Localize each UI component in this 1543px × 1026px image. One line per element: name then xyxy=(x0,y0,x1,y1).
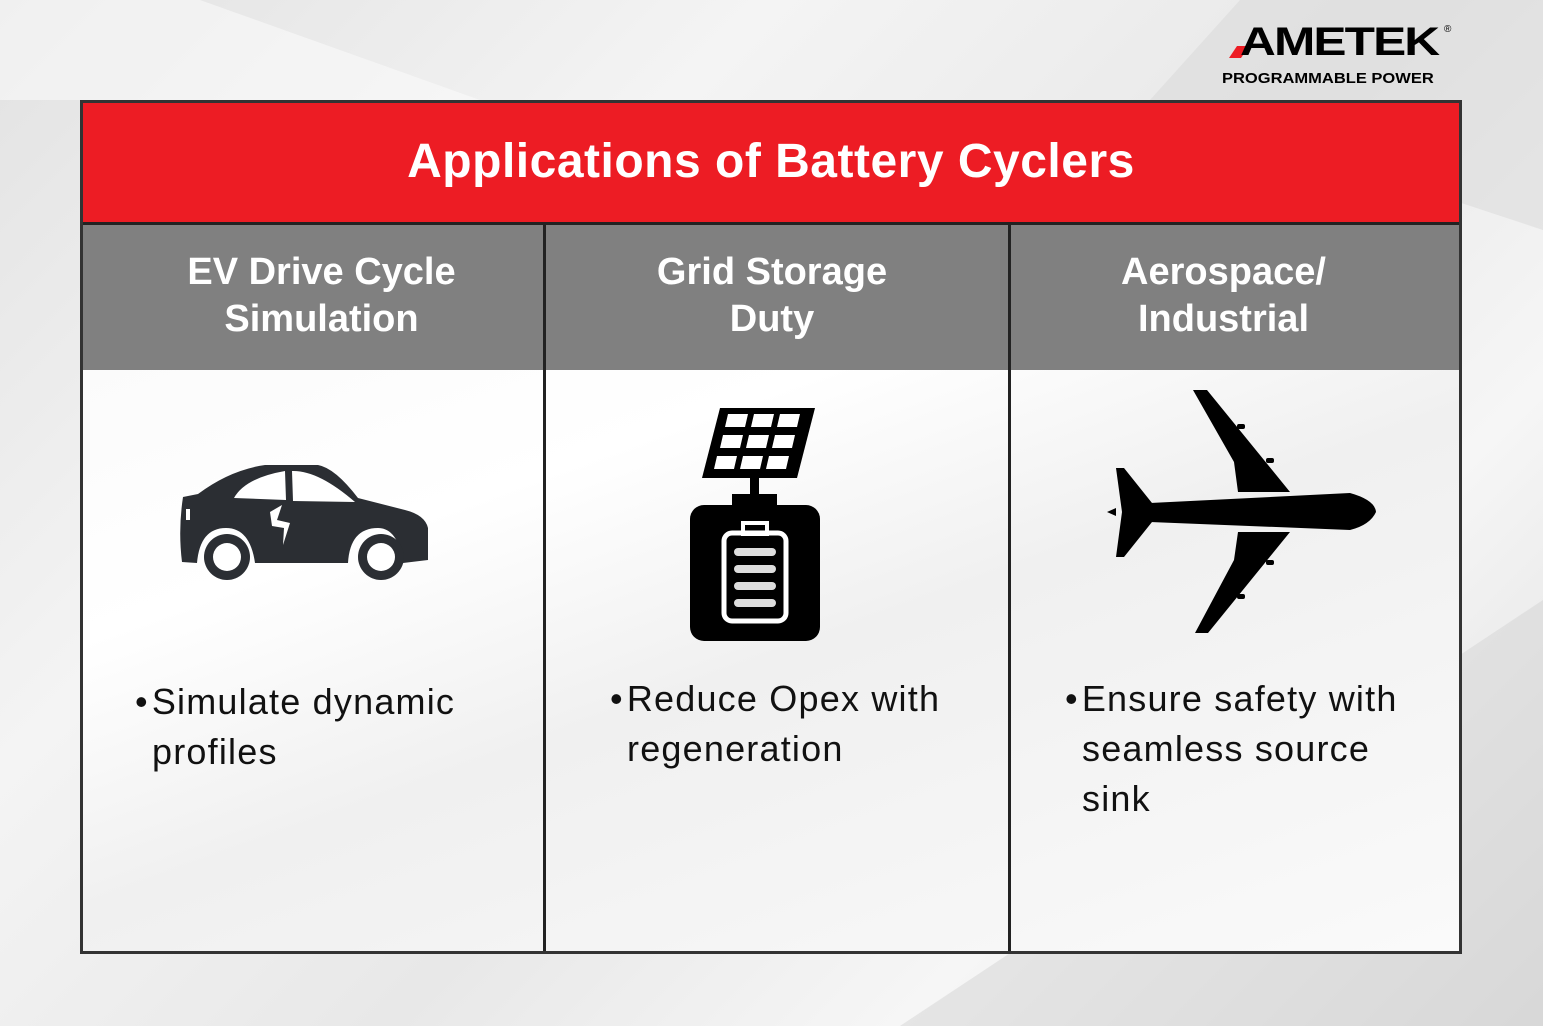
text: Aerospace bullet: •Ensure safety with xyxy=(1065,678,1398,719)
title bar: Applications of Battery Cyclers xyxy=(407,135,1135,188)
column header: EV xyxy=(187,251,456,340)
logo xyxy=(1222,20,1452,87)
column header: EV: EV Drive Cycle xyxy=(187,251,456,293)
column header: Aerospace xyxy=(1121,251,1326,340)
column header: Grid: Duty xyxy=(730,298,814,340)
column header: Aerospace: Aerospace/ xyxy=(1121,251,1326,293)
text: Grid bullet xyxy=(610,678,940,769)
gray header row xyxy=(83,225,1459,370)
column header: Grid: Grid Storage xyxy=(657,251,887,293)
logo red slash xyxy=(1229,46,1246,58)
text: Grid bullet: •Reduce Opex with xyxy=(610,678,940,719)
column header: Aerospace: Industrial xyxy=(1138,298,1309,340)
text: Aerospace bullet: sink xyxy=(1082,778,1151,819)
text: EV bullet: •Simulate dynamic xyxy=(135,681,455,722)
column header: Grid xyxy=(657,251,887,340)
text: EV bullet: profiles xyxy=(152,731,278,772)
column header: EV: Simulation xyxy=(224,298,419,340)
text: Grid bullet: regeneration xyxy=(627,728,844,769)
text: Aerospace bullet xyxy=(1065,678,1398,819)
main table xyxy=(80,100,1462,954)
logo: AMETEK xyxy=(1240,20,1438,64)
divider lines xyxy=(543,225,546,951)
logo: PROGRAMMABLE POWER xyxy=(1222,70,1434,87)
title bar xyxy=(83,103,1459,225)
text: Aerospace bullet: seamless source xyxy=(1082,728,1370,769)
logo: ® xyxy=(1444,24,1451,35)
text: EV bullet xyxy=(135,681,455,772)
